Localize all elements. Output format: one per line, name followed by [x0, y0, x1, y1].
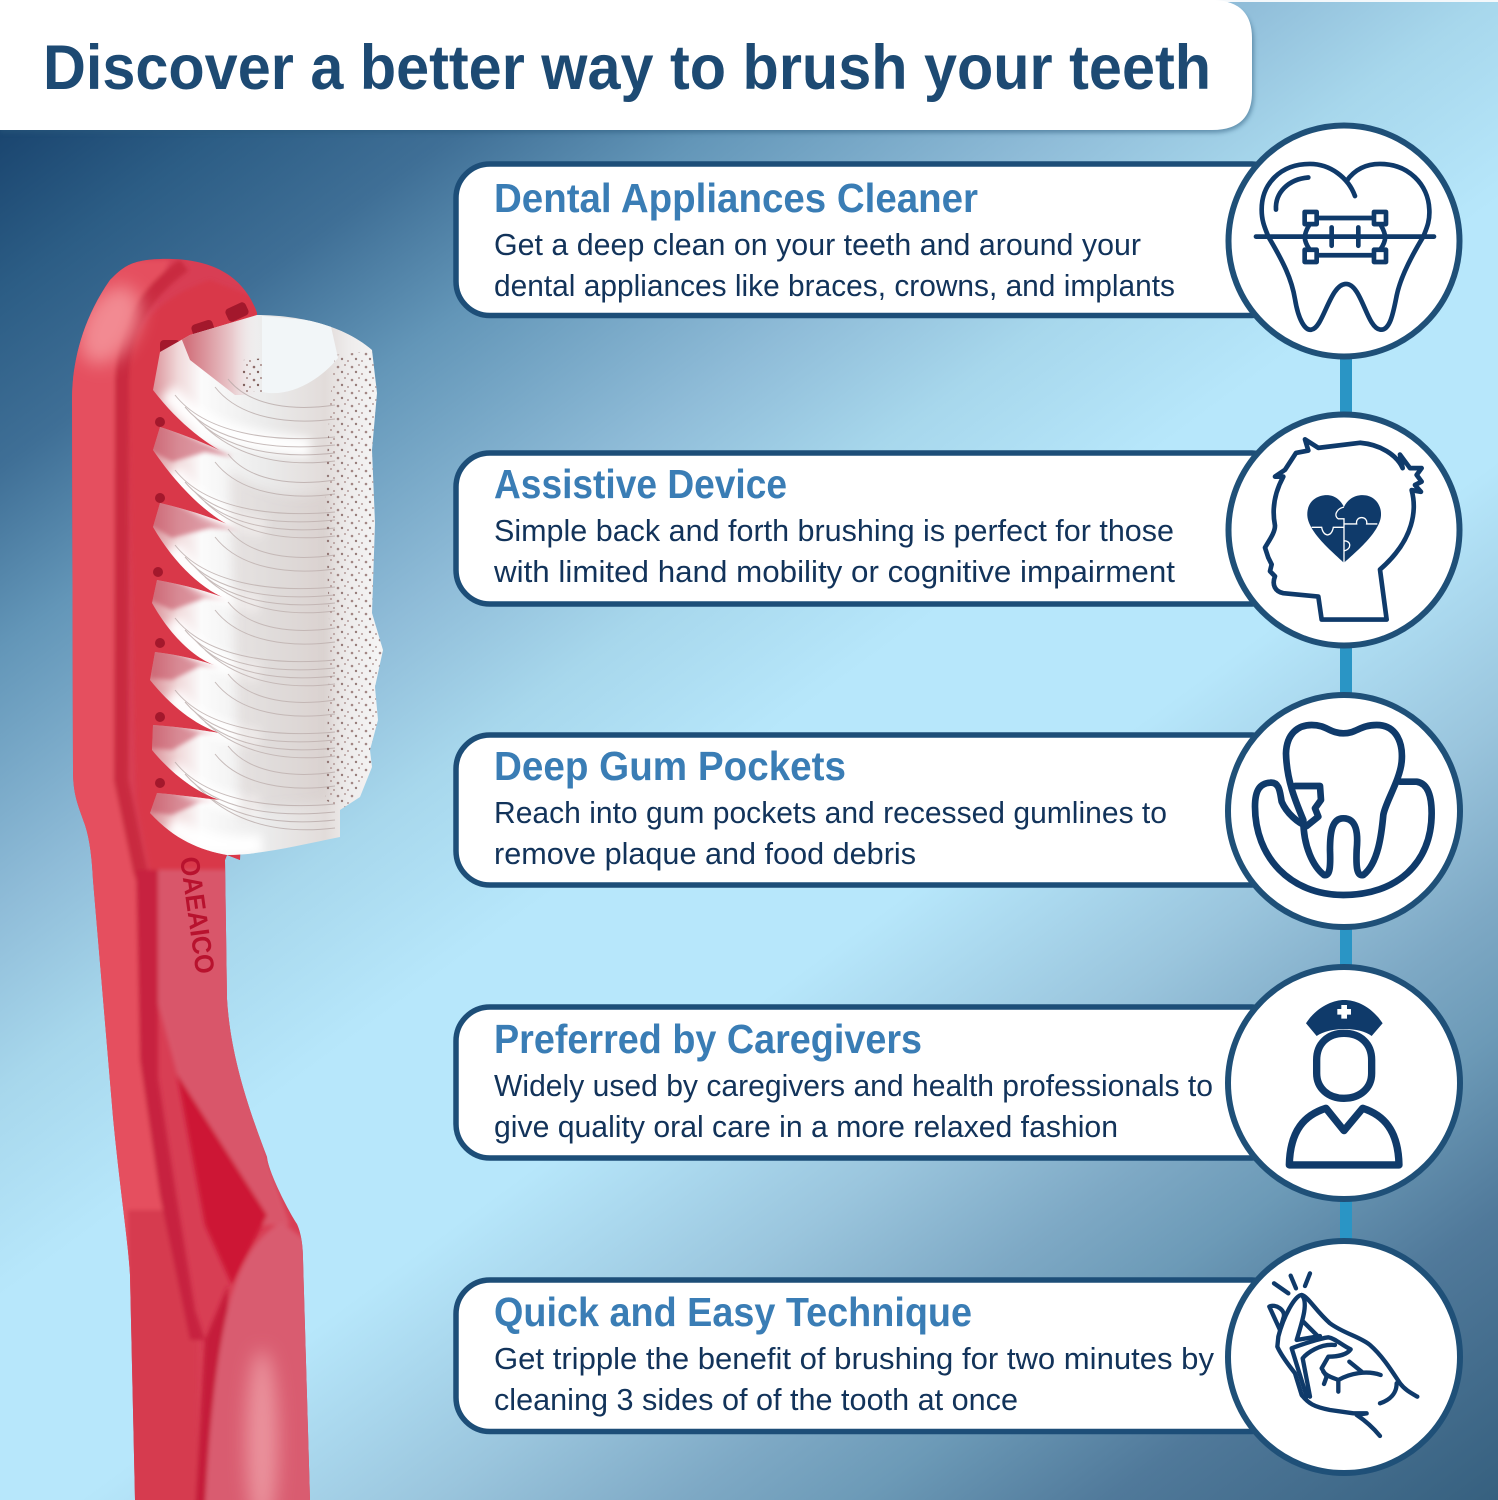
brush body silhouette — [72, 259, 310, 1500]
heading: Preferred by Caregivers — [494, 1016, 922, 1062]
description: Simple back and forth brushing is perfect for those — [494, 513, 1174, 548]
heading: Deep Gum Pockets — [494, 743, 846, 789]
outer lobe — [72, 258, 170, 1272]
description — [494, 1068, 1213, 1144]
lower dark line — [195, 1285, 228, 1500]
heading: Quick and Easy Technique — [494, 1289, 972, 1335]
groove — [121, 265, 184, 900]
header banner — [0, 0, 1254, 133]
description — [493, 513, 1175, 589]
bristle tufts — [145, 310, 390, 860]
description: Get tripple the benefit of brushing for two minutes by — [494, 1341, 1214, 1376]
panel: deep gum pockets — [456, 735, 1286, 885]
description — [494, 795, 1167, 871]
grey stain — [230, 470, 330, 820]
icon: nurse — [1228, 967, 1460, 1199]
title: Discover a better way to brush your teeth — [43, 33, 1211, 103]
description: remove plaque and food debris — [494, 836, 916, 871]
description: give quality oral care in a more relaxed fashion — [494, 1109, 1118, 1144]
dark channel — [136, 870, 205, 1340]
tuft base tints — [150, 425, 240, 815]
description: cleaning 3 sides of of the tooth at once — [494, 1382, 1018, 1417]
description: Reach into gum pockets and recessed gumlines to — [494, 795, 1167, 830]
lower left facet — [128, 1210, 199, 1500]
back tuft — [182, 316, 255, 395]
icon: tooth with braces — [1228, 126, 1460, 356]
description: with limited hand mobility or cognitive impairment — [493, 554, 1175, 589]
icon: snapping hand — [1228, 1241, 1460, 1473]
sockets — [153, 301, 250, 788]
heading: Dental Appliances Cleaner — [494, 175, 978, 221]
connector lines — [1340, 352, 1352, 1244]
panel: dental appliances cleaner — [456, 164, 1286, 316]
description: dental appliances like braces, crowns, and implants — [494, 268, 1175, 303]
panel: preferred by caregivers — [456, 1007, 1286, 1158]
lower facet — [205, 1222, 316, 1500]
icon: tooth with gum pocket — [1228, 695, 1460, 927]
highlights — [76, 278, 150, 372]
panel: assistive device — [456, 453, 1286, 604]
debris speckle — [325, 350, 386, 810]
neck pink — [153, 870, 290, 1225]
toothbrush — [60, 259, 390, 1500]
floor — [128, 280, 262, 870]
description — [494, 227, 1175, 303]
description: Get a deep clean on your teeth and around your — [494, 227, 1141, 262]
description — [494, 1341, 1214, 1417]
bristle strands — [175, 379, 335, 463]
heading: Assistive Device — [494, 461, 787, 507]
crimson wedge — [177, 1074, 267, 1285]
description: Widely used by caregivers and health professionals to — [494, 1068, 1213, 1103]
icon: head with puzzle heart — [1228, 414, 1460, 646]
panel: quick and easy technique — [456, 1280, 1286, 1432]
white sweeps — [168, 392, 310, 846]
embossed logo: OAEAICO — [174, 855, 220, 976]
brush shading — [60, 260, 316, 1500]
